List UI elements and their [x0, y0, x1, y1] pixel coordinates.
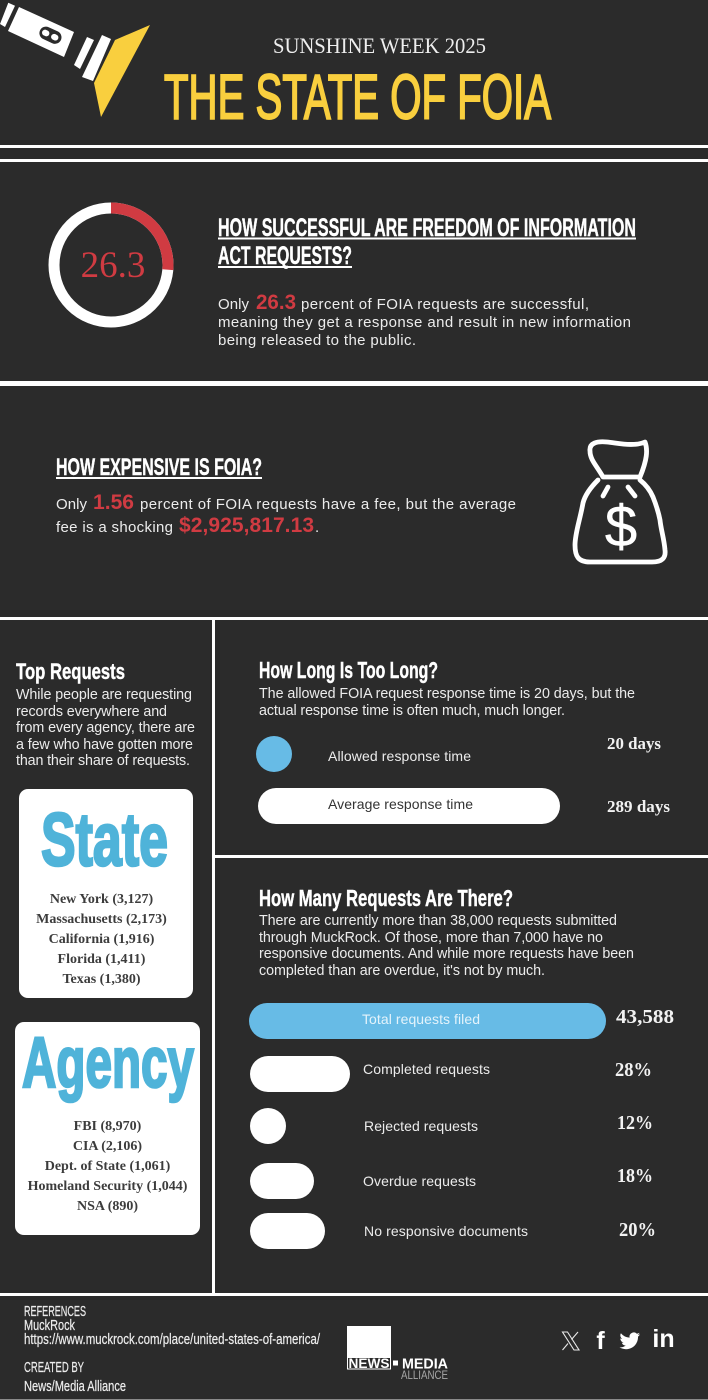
heading: Top Requests — [16, 659, 125, 684]
text block: There are currently more than 38,000 requests submitted — [259, 913, 617, 929]
text block: a few who have gotten more — [16, 737, 193, 753]
bar: average response time: Average response time — [328, 796, 473, 812]
card: state: Florida (1,411) — [58, 952, 146, 967]
heading: HOW EXPENSIVE IS FOIA? — [56, 454, 262, 481]
bar: allowed response time: Allowed response time — [328, 748, 471, 764]
text block: actual response time is often much, much longer. — [259, 703, 565, 719]
card: state: Texas (1,380) — [62, 972, 141, 987]
card: agency: Homeland Security (1,044) — [28, 1179, 188, 1194]
bar: overdue: Overdue requests — [363, 1173, 476, 1189]
subtitle: SUNSHINE WEEK 2025 — [273, 33, 486, 58]
references: MuckRock — [24, 1317, 75, 1334]
text block — [16, 687, 195, 769]
logo: News/Media Alliance: MEDIA — [402, 1356, 448, 1372]
bar: average response time — [258, 788, 670, 824]
references — [24, 1303, 321, 1395]
logo: News/Media Alliance: ALLIANCE — [401, 1370, 448, 1382]
card: state: Massachusetts (2,173) — [36, 912, 167, 927]
donut chart: 26.3 percent — [54, 208, 168, 322]
text block: than their share of requests. — [16, 753, 190, 769]
heading: How Long Is Too Long? — [259, 657, 438, 683]
text block: records everywhere and — [16, 704, 167, 720]
text block — [259, 686, 635, 719]
text block: through MuckRock. Of those, more than 7,000 have no — [259, 930, 603, 946]
header — [0, 3, 551, 133]
bar: no responsive documents: 20% — [619, 1219, 656, 1241]
card: agency: NSA (890) — [77, 1199, 138, 1214]
heading: How Many Requests Are There? — [259, 885, 513, 911]
text block: fee is a shocking — [56, 519, 173, 536]
icon: money bag: $ — [605, 494, 637, 559]
bar: no responsive documents — [250, 1213, 656, 1249]
bar: rejected: Rejected requests — [364, 1118, 478, 1134]
icon: linkedin: in — [652, 1325, 675, 1353]
panel: request counts — [249, 885, 674, 1249]
text block: percent of FOIA requests have a fee, but the average — [140, 496, 516, 513]
panel: response time — [256, 657, 670, 824]
text block — [56, 491, 516, 537]
card: agency: Dept. of State (1,061) — [45, 1159, 171, 1174]
text block: $2,925,817.13 — [179, 514, 314, 537]
icon: money bag — [575, 442, 665, 562]
bar: rejected — [250, 1108, 653, 1144]
bar: allowed response time — [256, 734, 661, 772]
card: state: California (1,916) — [49, 932, 155, 947]
heading: ACT REQUESTS? — [218, 242, 352, 270]
text block: The allowed FOIA request response time is 20 days, but the — [259, 686, 635, 702]
bar: no responsive documents: No responsive documents — [364, 1223, 528, 1239]
card: agency — [15, 1022, 200, 1235]
bar: allowed response time: 20 days — [607, 734, 661, 753]
text block — [218, 291, 631, 349]
card: state — [19, 789, 193, 998]
icon: flashlight — [0, 3, 150, 117]
bar: completed: 28% — [615, 1059, 652, 1081]
text block — [259, 913, 634, 979]
text block: 1.56 — [93, 491, 134, 514]
text block: Only — [56, 496, 88, 513]
icon: facebook: f — [596, 1327, 605, 1355]
card: agency: CIA (2,106) — [73, 1139, 142, 1154]
logo: News/Media Alliance: NEWS — [348, 1356, 390, 1371]
card: state: New York (3,127) — [50, 892, 153, 907]
text block: being released to the public. — [218, 332, 416, 349]
text block: While people are requesting — [16, 687, 192, 703]
panel: success rate — [54, 208, 636, 349]
card: agency: FBI (8,970) — [74, 1119, 142, 1134]
heading — [218, 214, 636, 270]
text block: responsive documents. And while more requests have been — [259, 946, 634, 962]
references: https://www.muckrock.com/place/united-states-of-america/ — [24, 1331, 321, 1348]
text block: meaning they get a response and result in new information — [218, 314, 631, 331]
bar: completed: Completed requests — [363, 1061, 490, 1077]
text block: percent of FOIA requests are successful, — [301, 296, 589, 313]
logo: News/Media Alliance — [347, 1326, 448, 1382]
bar: overdue — [250, 1163, 653, 1199]
bar: total requests: Total requests filed — [362, 1011, 480, 1027]
panel: top requests — [15, 659, 200, 1235]
icon: twitter — [620, 1332, 640, 1349]
panel: cost — [56, 442, 665, 562]
card: state: State — [41, 798, 168, 882]
text block: 26.3 — [256, 291, 296, 314]
references: CREATED BY — [24, 1359, 84, 1376]
text block: . — [315, 519, 319, 536]
donut chart: 26.3 percent: 26.3 — [81, 245, 145, 286]
bar: overdue: 18% — [617, 1165, 653, 1187]
text block: completed than are overdue, it's not by much. — [259, 963, 545, 979]
bar: total requests — [249, 1003, 674, 1039]
text block: Only — [218, 296, 250, 313]
references: News/Media Alliance — [24, 1378, 126, 1395]
card: agency: Agency — [22, 1024, 194, 1103]
bar: completed — [250, 1056, 652, 1092]
text block: from every agency, there are — [16, 720, 195, 736]
references: REFERENCES — [24, 1303, 86, 1320]
bar: total requests: 43,588 — [616, 1006, 674, 1028]
bar: average response time: 289 days — [607, 797, 670, 816]
icon: X — [562, 1332, 579, 1350]
bar: rejected: 12% — [617, 1112, 653, 1134]
footer — [24, 1303, 675, 1395]
